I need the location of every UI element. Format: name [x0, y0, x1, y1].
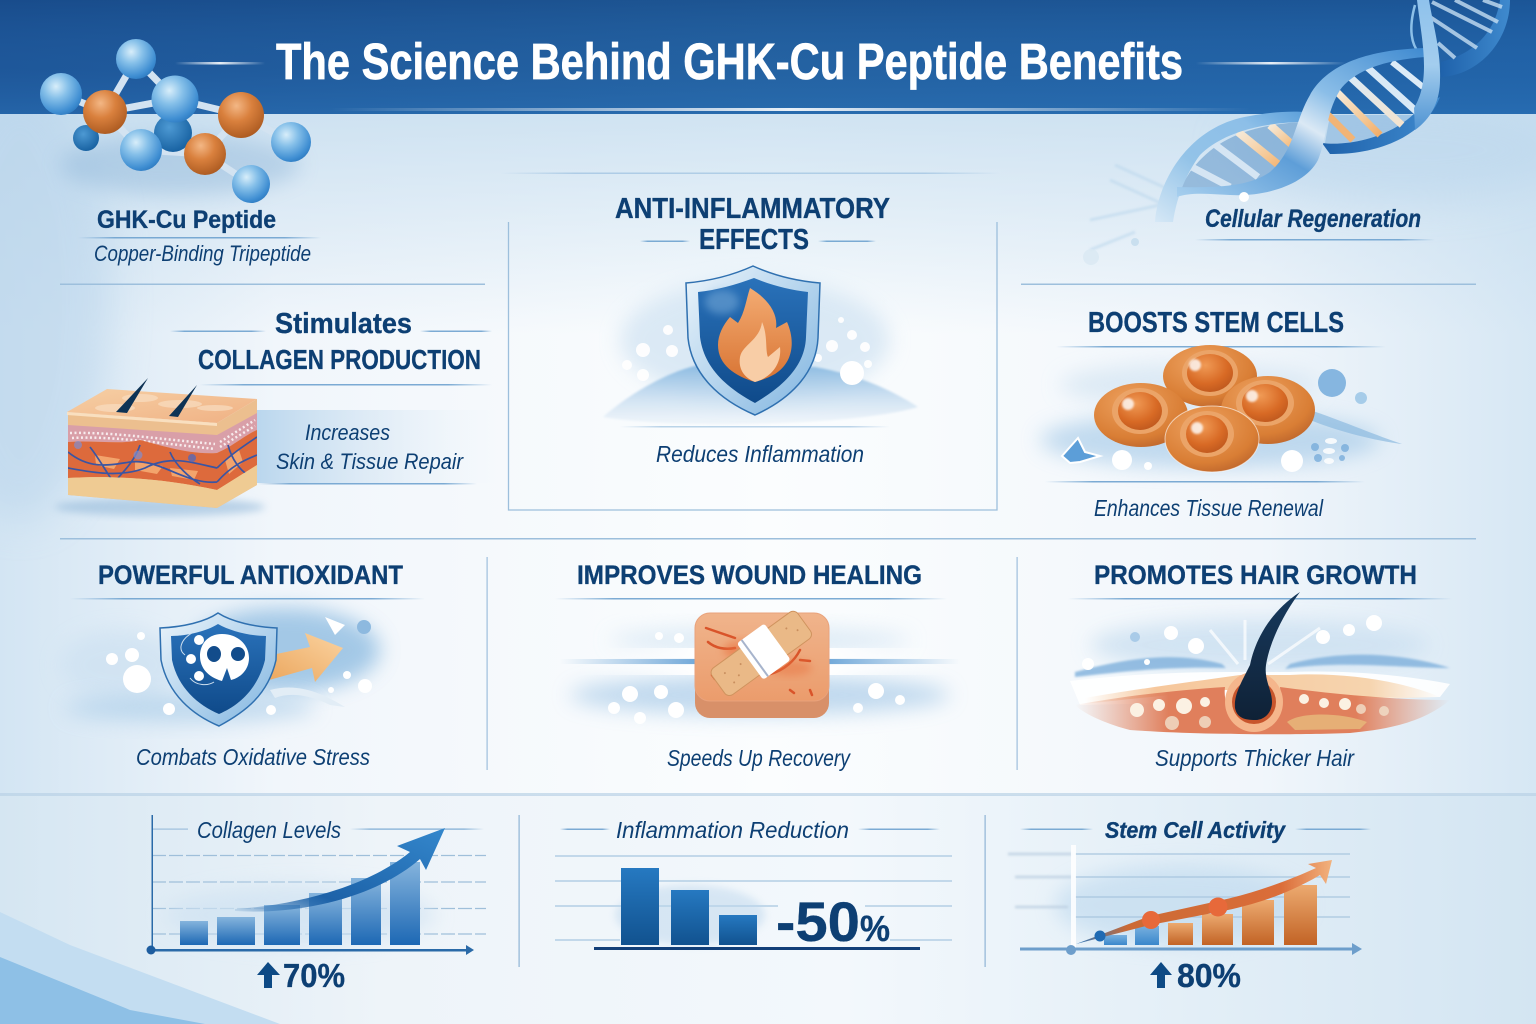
- DNA front ribbons: [1155, 112, 1306, 222]
- icon: shield with free radical skull: [160, 613, 277, 726]
- collagen stat: [257, 957, 345, 994]
- stem stat: 80%: [1177, 957, 1241, 994]
- collagen trend arrow: [235, 828, 445, 912]
- stem cells backdrop: [1040, 363, 1402, 482]
- inflammation stat: -50: [776, 890, 860, 953]
- wound healing heading: IMPROVES WOUND HEALING: [577, 560, 922, 590]
- collagen heading: [170, 308, 492, 386]
- caption: Enhances Tissue Renewal: [1094, 495, 1324, 521]
- icon: hair follicle: [1225, 592, 1300, 732]
- panel: powerful antioxidant: [60, 560, 425, 770]
- stem stat: [1150, 957, 1241, 994]
- backdrop mist with dots: [603, 280, 918, 428]
- header banner: [0, 0, 1536, 114]
- stem bars: [1104, 885, 1317, 945]
- DNA helix icon: [1083, 0, 1510, 265]
- collagen caption: [276, 420, 465, 474]
- anti-inflammatory heading: ANTI-INFLAMMATORY: [615, 193, 890, 225]
- caption: Reduces Inflammation: [656, 441, 864, 467]
- panel: improves wound healing: [555, 560, 960, 771]
- hair growth heading: PROMOTES HAIR GROWTH: [1094, 560, 1417, 590]
- stem cells heading: BOOSTS STEM CELLS: [1088, 307, 1344, 339]
- label: GHK-Cu Peptide: Copper-Binding Tripeptide: [94, 241, 311, 266]
- chart: inflammation reduction: [555, 817, 952, 953]
- DNA rungs: [1188, 62, 1423, 187]
- antioxidant backdrop: [60, 608, 380, 722]
- section dividers: [60, 172, 1476, 770]
- hair backdrop: [1075, 615, 1450, 677]
- icon: orange arrow: [262, 633, 343, 682]
- DNA upper right loop: [1411, 0, 1510, 77]
- collagen caption: Skin & Tissue Repair: [276, 449, 465, 474]
- panel frame: [508, 222, 997, 510]
- DNA middle loop shading: [1325, 115, 1424, 143]
- collagen heading: Stimulates: [275, 308, 412, 340]
- collagen stat: 70%: [283, 957, 345, 994]
- icon: bandage on skin patch: [695, 604, 829, 718]
- molecule bonds: [61, 59, 291, 184]
- inflammation stat: %: [860, 908, 890, 949]
- inflammation chart title: Inflammation Reduction: [616, 817, 849, 843]
- collagen caption backdrop: [257, 410, 497, 484]
- molecule atoms: [40, 39, 311, 203]
- caption: Supports Thicker Hair: [1155, 745, 1355, 771]
- wound healing backdrop: [560, 628, 960, 724]
- caption: Combats Oxidative Stress: [136, 744, 370, 770]
- molecule icon: [40, 39, 311, 203]
- stem trend arrow: [1076, 860, 1332, 944]
- label: GHK-Cu Peptide: GHK-Cu Peptide: [97, 206, 276, 234]
- inflammation baseline: [594, 947, 920, 950]
- collagen bars: [180, 862, 420, 945]
- skin layers: [1070, 672, 1450, 734]
- collagen heading: COLLAGEN PRODUCTION: [198, 344, 481, 375]
- panel: promotes hair growth: [1068, 560, 1452, 771]
- stem axes: [1020, 943, 1362, 955]
- title with flanking lines: The Science Behind GHK-Cu Peptide Benefits: [276, 33, 1183, 90]
- collagen axes: [146, 815, 474, 955]
- chart: stem cell activity: [1008, 817, 1371, 994]
- icon: shield with flame: [686, 266, 820, 415]
- icon: stem cells: [1094, 345, 1315, 472]
- stats dividers: [518, 815, 986, 967]
- stem chart title: Stem Cell Activity: [1105, 817, 1286, 843]
- antioxidant heading: POWERFUL ANTIOXIDANT: [98, 560, 403, 590]
- panel: anti-inflammatory effects: [508, 193, 997, 510]
- bottom statistics band background: [0, 793, 1536, 1024]
- collagen caption: Increases: [305, 420, 390, 445]
- anti-inflammatory heading: EFFECTS: [699, 224, 809, 256]
- inflammation bars: [621, 868, 757, 945]
- collagen chart title: Collagen Levels: [197, 817, 341, 843]
- DNA inner shading: [1180, 122, 1303, 188]
- label: Cellular Regeneration: Cellular Regeneration: [1205, 205, 1421, 233]
- caption: Speeds Up Recovery: [667, 745, 851, 771]
- DNA back strand: [1322, 97, 1440, 154]
- skin cross-section icon: [55, 378, 265, 516]
- anti-inflammatory heading: [615, 193, 890, 256]
- chart: collagen levels: [146, 815, 486, 994]
- panel: collagen production: [55, 308, 497, 516]
- label: GHK-Cu Peptide: [78, 206, 321, 266]
- panel: boosts stem cells: [1040, 307, 1402, 521]
